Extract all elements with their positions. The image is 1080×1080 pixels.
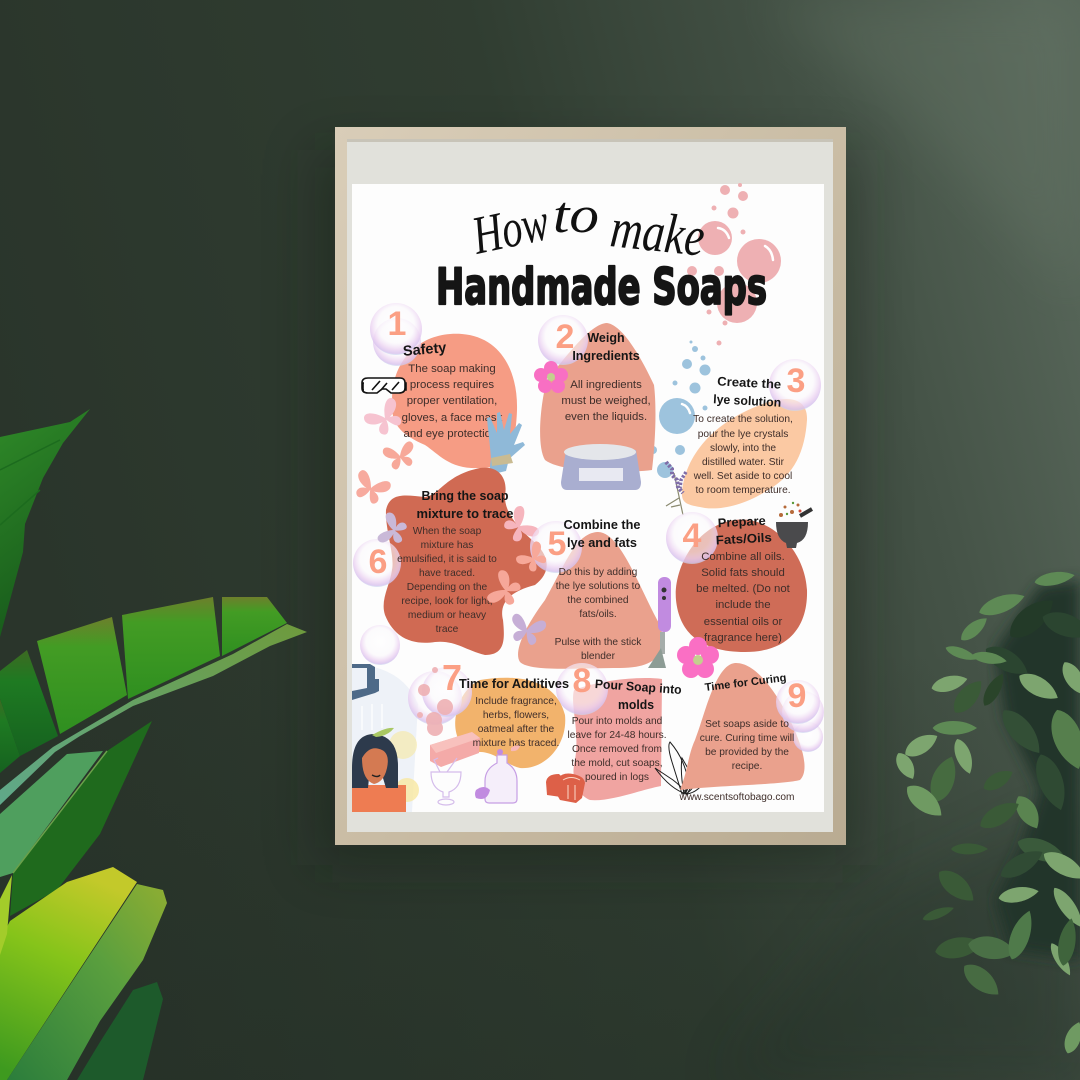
text: combine body: Do this by adding xyxy=(559,567,638,578)
panel: step 2 weigh ingredients xyxy=(534,315,655,490)
bubble 5 xyxy=(530,521,582,573)
bubble 1: 1 xyxy=(388,305,406,343)
bubble 8 xyxy=(556,662,608,715)
text: combine body: Pulse with the stick xyxy=(555,637,642,648)
text: additives body: oatmeal after the xyxy=(478,724,555,735)
text: lye body: distilled water. Stir xyxy=(702,457,785,468)
text: curing body: recipe. xyxy=(732,761,762,772)
text: oils body: include the xyxy=(715,599,771,611)
text: trace body: When the soap xyxy=(413,526,482,537)
text: safety body: proper ventilation, xyxy=(407,395,497,407)
text: additives body: mixture has traced. xyxy=(473,738,559,749)
bubble 7 xyxy=(408,657,472,736)
illustration: shower and woman xyxy=(352,664,419,812)
text: trace body xyxy=(397,526,497,635)
heading: weigh ingredients: Ingredients xyxy=(572,349,640,363)
text: weigh body: All ingredients xyxy=(570,379,642,391)
icon: butterfly pink wings xyxy=(499,504,541,548)
text: additives body xyxy=(473,696,559,749)
heading: combine: Combine the xyxy=(564,518,641,532)
text: trace body: recipe, look for light, xyxy=(401,596,493,607)
panel: step 5 combine the lye and fats xyxy=(486,518,671,669)
panel: step 9 time for curing xyxy=(678,663,824,803)
icon: soap bar xyxy=(430,732,480,767)
leaf: middle xyxy=(0,721,152,916)
text: trace body: have traced. xyxy=(419,568,475,579)
pink bubbles decoration xyxy=(687,183,781,346)
text: combine body: blender xyxy=(581,651,616,662)
heading: weigh ingredients xyxy=(572,331,640,363)
text: curing body: cure. Curing time will xyxy=(700,733,794,744)
icon: lotion bottle xyxy=(475,745,520,803)
text: oils body xyxy=(696,551,791,644)
heading: prepare fats oils: Prepare xyxy=(717,514,766,530)
icon: butterfly pale pink xyxy=(362,396,408,440)
icon: butterfly salmon xyxy=(486,569,524,611)
text: additives body: Include fragrance, xyxy=(475,696,557,707)
bubble 1 xyxy=(370,303,422,366)
icon: kitchen scale xyxy=(561,444,641,490)
icon: butterfly coral 1 xyxy=(382,441,418,472)
bubble 2: 2 xyxy=(556,318,574,356)
text: lye body: slowly, into the xyxy=(710,443,776,454)
heading: pour soap: Pour Soap into xyxy=(594,677,683,697)
title: to xyxy=(553,187,599,244)
heading: weigh ingredients: Weigh xyxy=(587,331,625,345)
text: lye body xyxy=(693,414,793,496)
text: safety body: process requires xyxy=(410,379,494,391)
picture frame xyxy=(335,127,846,845)
text: curing body xyxy=(700,719,794,772)
text: molds body: the mold, cut soaps, xyxy=(571,758,663,769)
icon: pink flower xyxy=(677,637,719,678)
text: oils body: fragrance here) xyxy=(704,632,782,644)
panel: step 1 safety xyxy=(362,303,525,475)
text: molds body xyxy=(567,716,667,783)
bubble 8: 8 xyxy=(573,662,591,700)
text: oils body: Combine all oils. xyxy=(701,551,785,563)
blob 5 xyxy=(518,532,663,669)
icon: mortar outline xyxy=(431,758,461,805)
text: combine body: the lye solutions to xyxy=(556,581,641,592)
bubble 3 xyxy=(769,359,821,411)
text: lye body: to room temperature. xyxy=(695,485,791,496)
blob 3 xyxy=(682,399,807,508)
bubble 4: 4 xyxy=(683,517,702,555)
bubble 7: 7 xyxy=(442,657,462,698)
leaf: bottom small xyxy=(77,982,163,1080)
blob 7 xyxy=(455,678,565,768)
bubble 3: 3 xyxy=(787,362,805,400)
text: lye body: well. Set aside to cool xyxy=(693,471,792,482)
heading: pour soap: molds xyxy=(618,698,654,712)
blob 8 xyxy=(573,678,662,800)
icon: flower xyxy=(534,361,568,393)
text: trace body: emulsified, it is said to xyxy=(397,554,497,565)
heading: bring the soap xyxy=(416,489,514,521)
text: molds body: Pour into molds and xyxy=(572,716,663,727)
blob 6 xyxy=(384,468,547,655)
text: website: www.scentsoftobago.com xyxy=(678,792,794,803)
icon: butterfly coral xyxy=(515,540,552,576)
bubble 4 xyxy=(666,512,718,564)
heading: bring the soap: Bring the soap xyxy=(422,489,509,503)
title: make xyxy=(608,197,708,269)
text: oils body: be melted. (Do not xyxy=(696,583,791,595)
text: additives body: herbs, flowers, xyxy=(483,710,549,721)
bubble decoration lower left xyxy=(360,625,400,665)
heading: time for curing: Time for Curing xyxy=(704,672,787,694)
text: molds body: poured in logs xyxy=(585,772,649,783)
icon: gloves xyxy=(487,412,525,475)
text: safety body: The soap making xyxy=(408,363,496,375)
panel: step 7 time for additives xyxy=(408,657,569,805)
heading: combine: lye and fats xyxy=(567,536,637,550)
heading: safety: Safety xyxy=(402,340,447,360)
icon: stick blender xyxy=(648,577,671,668)
blob 9 xyxy=(680,663,805,790)
title: How xyxy=(466,191,554,266)
poster paper xyxy=(352,184,824,812)
text: oils body: Solid fats should xyxy=(701,567,785,579)
heading: create the lye solution: lye solution xyxy=(713,392,782,410)
bubble 6: 6 xyxy=(369,543,387,581)
text: lye body: To create the solution, xyxy=(693,414,793,425)
text: trace body: mixture has xyxy=(421,540,473,551)
text: lye body: pour the lye crystals xyxy=(698,429,788,440)
panel: step 3 create the lye solution xyxy=(666,359,821,515)
icon: aloe outline xyxy=(655,742,713,794)
heading: pour soap xyxy=(594,677,683,712)
text: curing body: be provided by the xyxy=(705,747,789,758)
leaf: banana segmented xyxy=(0,597,307,805)
blob 2 xyxy=(540,323,655,472)
icon: butterfly coral 2 xyxy=(350,469,392,507)
heading: prepare fats oils: Fats/Oils xyxy=(715,531,772,547)
blue bubbles decoration xyxy=(649,340,710,478)
text: combine body: fats/oils. xyxy=(579,609,617,620)
text: safety body: and eye protection. xyxy=(404,428,500,440)
panel: step 8 pour soap into molds xyxy=(546,662,713,803)
bubble 6 xyxy=(353,539,401,587)
text: combine body xyxy=(555,567,642,662)
text: weigh body xyxy=(561,379,651,423)
text: trace body: Depending on the xyxy=(407,582,488,593)
text: safety body xyxy=(402,363,503,440)
icon: jelly soaps xyxy=(546,774,585,803)
text: trace body: medium or heavy xyxy=(408,610,487,621)
panel: step 6 bring the soap mixture to trace xyxy=(353,468,547,655)
icon: lavender xyxy=(666,462,686,515)
bubble 9: 9 xyxy=(788,677,806,715)
text: molds body: Once removed from xyxy=(572,744,662,755)
heading: bring the soap: mixture to trace xyxy=(416,507,514,521)
bubble 9 xyxy=(776,677,824,752)
plant: left banana leaves xyxy=(0,409,307,1080)
heading: combine xyxy=(564,518,641,550)
blob 1 xyxy=(392,334,517,468)
heading: time for additives: Time for Additives xyxy=(459,677,569,691)
bubble 5: 5 xyxy=(548,525,566,563)
icon: butterfly purple xyxy=(377,511,410,549)
heading: create the lye solution xyxy=(713,374,782,410)
blob 4 xyxy=(676,520,807,652)
text: curing body: Set soaps aside to xyxy=(705,719,789,730)
text: weigh body: even the liquids. xyxy=(565,411,647,423)
icon: goggles xyxy=(362,378,406,393)
text: weigh body: must be weighed, xyxy=(561,395,651,407)
bubble 2 xyxy=(538,315,588,365)
text: combine body: the combined xyxy=(567,595,629,606)
icon: butterfly lilac xyxy=(507,613,547,647)
heading: prepare fats oils xyxy=(715,514,772,547)
text: oils body: essential oils or xyxy=(704,616,782,628)
text: trace body: trace xyxy=(436,624,459,635)
text: safety body: gloves, a face mask xyxy=(402,412,503,424)
title xyxy=(436,187,767,316)
title: Handmade Soaps xyxy=(436,258,767,316)
panel: step 4 prepare fats/oils xyxy=(666,502,812,678)
leaf: top xyxy=(0,409,90,637)
leaf: big lime xyxy=(0,867,167,1080)
plant: right ficus leaves xyxy=(892,569,1080,1056)
text: molds body: leave for 24-48 hours. xyxy=(567,730,667,741)
heading: create the lye solution: Create the xyxy=(717,374,782,392)
icon: mortar and spices xyxy=(776,502,812,548)
